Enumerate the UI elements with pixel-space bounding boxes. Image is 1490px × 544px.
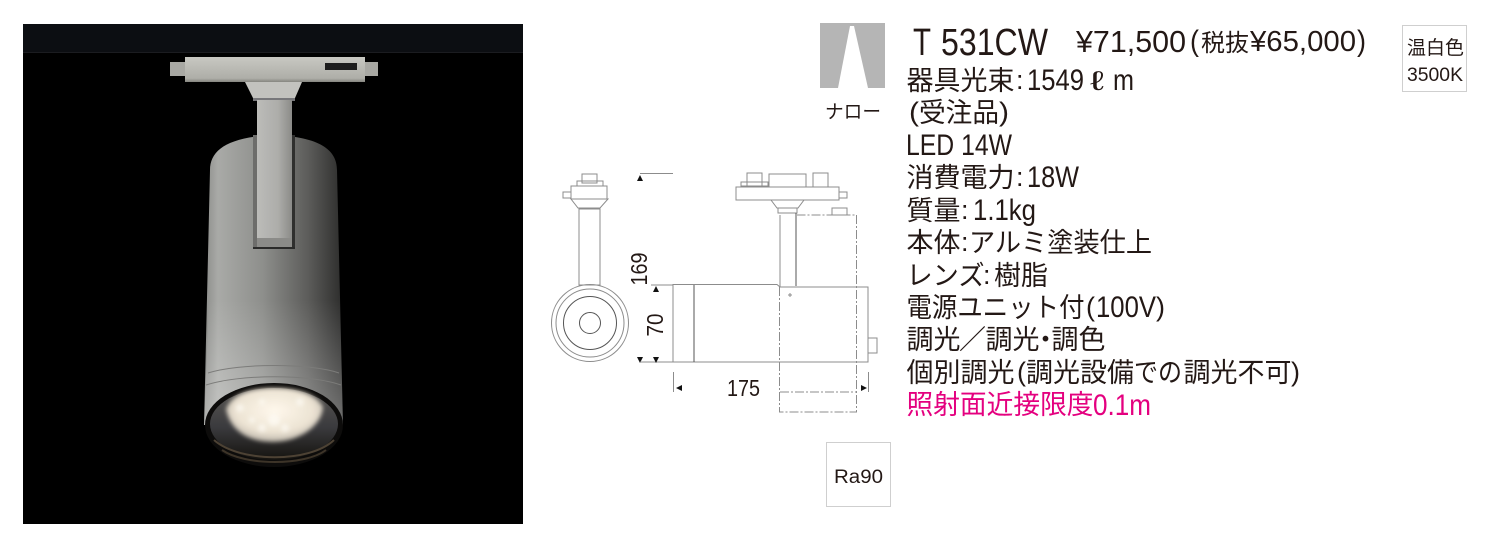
spec: power supply: ) <box>1156 292 1165 322</box>
specification list <box>906 64 1300 422</box>
spec: individual dimming: ) <box>1291 357 1300 387</box>
spec: dimming: ／ <box>959 325 986 355</box>
spec: minimum distance warning: 0.1m <box>1093 389 1151 422</box>
fixture cylinder body <box>204 100 343 425</box>
dimension: length 175 <box>674 372 868 401</box>
beam angle icon <box>820 23 885 88</box>
spec: power consumption <box>906 161 1080 194</box>
price: 税抜 <box>1201 30 1249 57</box>
beam label: ナロー <box>825 102 881 123</box>
colour temperature badge <box>1402 26 1466 92</box>
model number: 531CW <box>941 22 1048 64</box>
spec: dimming: 調色 <box>1052 325 1106 355</box>
spec: lens: レンズ <box>906 261 984 291</box>
spec: luminous flux: m <box>1113 64 1134 97</box>
spec: body finish: : <box>961 227 969 257</box>
spec: luminous flux: 1549 <box>1027 64 1084 97</box>
spec: lens <box>906 260 1048 291</box>
spec: power supply <box>906 291 1165 324</box>
dimension: height 169: 169 <box>626 252 652 286</box>
colour temperature badge: 3500K <box>1407 65 1463 86</box>
spec: body finish: アルミ塗装仕上 <box>969 228 1152 258</box>
spec: individual dimming: 調光不可 <box>1184 358 1292 388</box>
spec: dimming: 調光 <box>986 325 1040 355</box>
lens with LED glow <box>205 383 343 467</box>
spec: individual dimming <box>906 357 1300 388</box>
model number: T <box>913 22 931 64</box>
dimension: height 169 <box>626 174 673 363</box>
spec: power supply: 100V <box>1096 291 1156 324</box>
spec: LED wattage: LED 14W <box>906 129 1013 162</box>
front view technical drawing <box>552 174 628 362</box>
Ra90 badge: Ra90 <box>834 467 883 488</box>
price: ¥65,000 <box>1249 26 1356 58</box>
spec: luminous flux: 器具光束 <box>906 66 1014 96</box>
model number <box>913 22 1048 64</box>
price: ) <box>1357 25 1366 58</box>
spec: luminous flux <box>906 64 1134 97</box>
spec: made to order: ) <box>999 97 1009 127</box>
Ra90 badge <box>826 442 890 506</box>
spec: power supply: ( <box>1086 292 1095 322</box>
spec: luminous flux: ℓ <box>1090 66 1104 96</box>
spec: individual dimming: での <box>1134 358 1182 388</box>
colour temperature badge: 温白色 <box>1407 37 1464 59</box>
spec: weight <box>906 194 1036 227</box>
product photo panel <box>23 24 523 524</box>
spec: lens: 樹脂 <box>994 261 1048 291</box>
spec: weight: 質量 <box>906 196 960 226</box>
dimension: diameter 70 <box>640 285 673 363</box>
track adapter <box>170 57 378 101</box>
spec: minimum distance warning: 照射面近接限度 <box>906 390 1094 420</box>
spec: power consumption: 18W <box>1027 161 1080 194</box>
spec: dimming <box>906 325 1106 355</box>
price: ¥71,500 <box>1075 24 1186 59</box>
spec: luminous flux: : <box>1016 65 1024 95</box>
ceiling track <box>23 24 523 53</box>
dimension: length 175: 175 <box>727 375 760 401</box>
price: ( <box>1190 25 1199 58</box>
spec: body finish: 本体 <box>906 228 960 258</box>
spec: individual dimming: 個別調光 <box>906 358 1014 388</box>
spec: dimming: 調光 <box>906 325 960 355</box>
spec: individual dimming: ( <box>1017 357 1026 387</box>
dimension: diameter 70: 70 <box>642 314 668 336</box>
spec: lens: : <box>983 260 991 290</box>
spec: power consumption: : <box>1016 162 1024 192</box>
spec: individual dimming: 調光設備 <box>1026 358 1134 388</box>
spec: weight: : <box>961 195 969 225</box>
spec: power consumption: 消費電力 <box>906 163 1014 193</box>
price <box>1075 24 1366 59</box>
spec: made to order: 受注品 <box>919 98 999 128</box>
spec: power supply: 電源ユニット付 <box>906 293 1084 323</box>
spec: dimming: ・ <box>1032 325 1059 355</box>
spec: weight: 1.1kg <box>973 194 1036 227</box>
side view technical drawing <box>673 173 877 412</box>
spec: made to order: ( <box>909 97 919 127</box>
